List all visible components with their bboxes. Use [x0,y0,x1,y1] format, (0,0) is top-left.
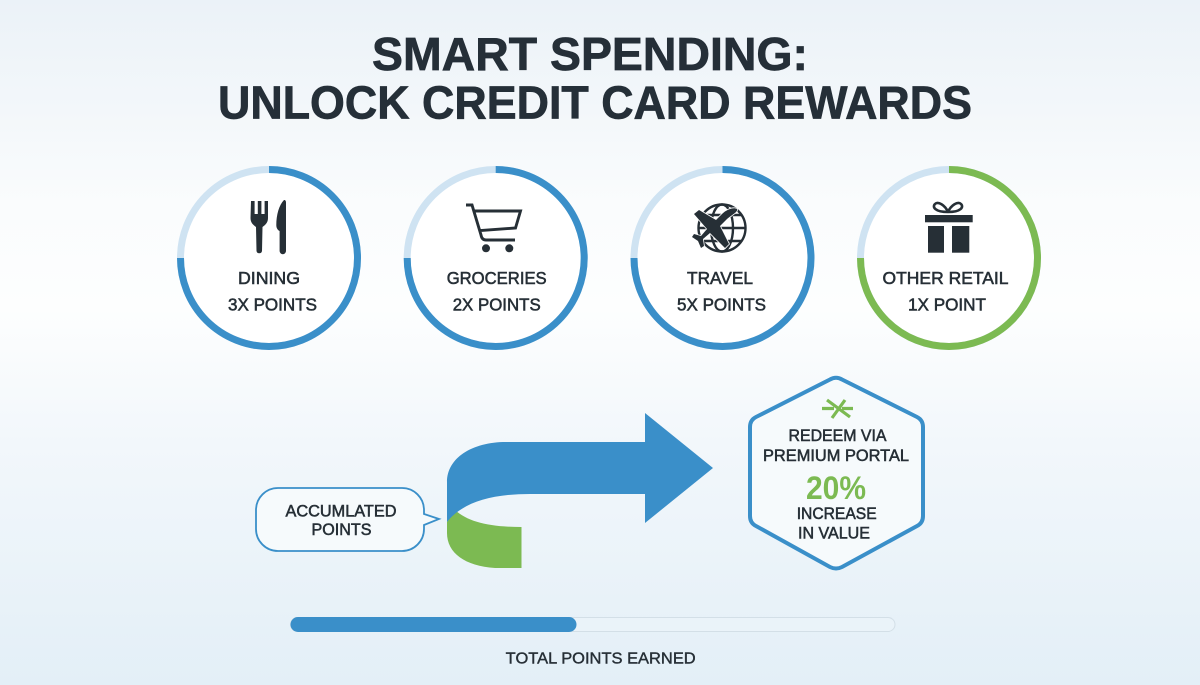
panel: groceries [407,170,584,346]
panel: redeem hexagon: PREMIUM PORTAL [763,446,909,465]
panel: other retail: OTHER RETAIL [882,268,1009,288]
icon: plane and globe [692,204,746,252]
panel: travel [634,170,811,346]
panel: dining: 3X POINTS [228,294,317,314]
panel: travel: TRAVEL [687,268,753,288]
panel: groceries: GROCERIES [447,268,547,288]
callout: accumulated points: POINTS [312,520,372,539]
icon: fork and knife [251,200,286,254]
panel: other retail: 1X POINT [908,294,986,314]
panel: dining [180,170,358,346]
panel: redeem hexagon [750,378,923,568]
panel: travel: 5X POINTS [677,294,766,314]
panel: groceries: 2X POINTS [453,294,541,314]
panel: redeem hexagon: INCREASE [797,504,877,523]
icon: shopping cart [466,205,520,252]
arrow: points flow [447,413,713,568]
panel: redeem hexagon: REDEEM VIA [788,426,887,445]
progress bar: total points [290,617,895,668]
panel: redeem hexagon: 20% [806,470,866,506]
progress bar: total points: TOTAL POINTS EARNED [506,650,696,668]
title: UNLOCK CREDIT CARD REWARDS [218,76,972,128]
title [218,28,972,128]
icon: gift box [925,203,973,253]
panel: other retail [860,170,1038,346]
title: SMART SPENDING: [372,28,808,80]
panel: redeem hexagon: IN VALUE [798,524,870,543]
icon: redeem arrows [822,400,853,418]
callout: accumulated points: ACCUMLATED [286,502,396,520]
callout: accumulated points [256,488,439,551]
panel: dining: DINING [238,268,300,288]
